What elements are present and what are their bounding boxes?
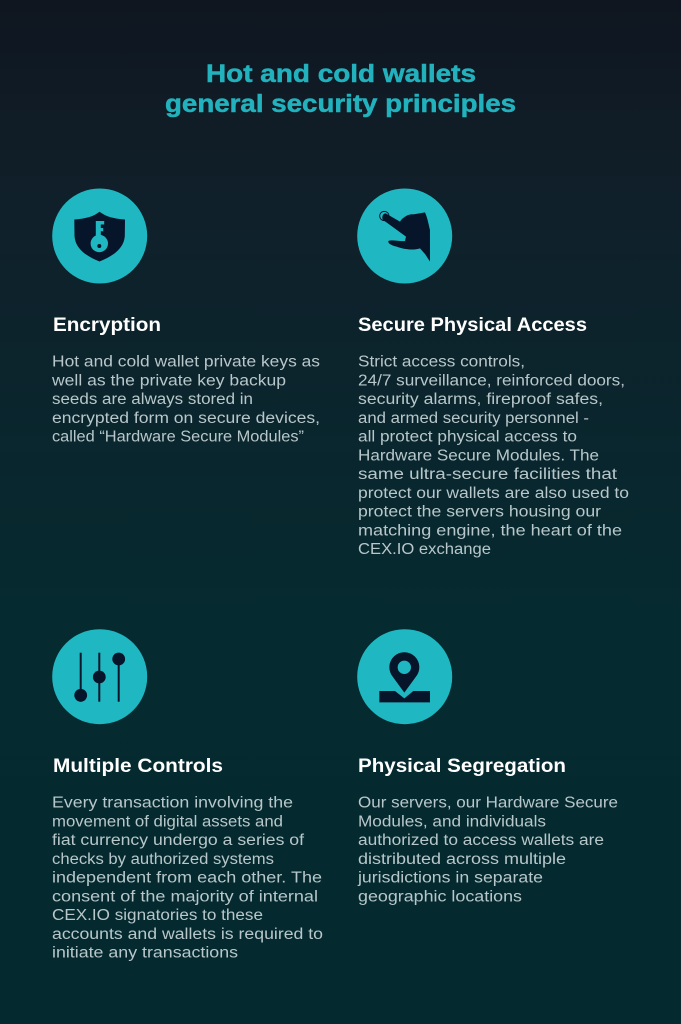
body text: protect our wallets are also used to	[358, 485, 629, 502]
body text: distributed across multiple	[358, 851, 566, 868]
body text: movement of digital assets and	[52, 813, 283, 830]
body text: independent from each other. The	[52, 870, 322, 886]
body text: geographic locations	[358, 888, 522, 905]
body text: encrypted form on secure devices,	[52, 410, 320, 427]
body text: 24/7 surveillance, reinforced doors,	[358, 372, 625, 390]
body text: well as the private key backup	[51, 372, 286, 390]
body text: accounts and wallets is required to	[52, 926, 323, 943]
body text: initiate any transactions	[52, 944, 238, 962]
body text: Strict access controls,	[358, 354, 525, 371]
body text: Every transaction involving the	[52, 794, 293, 812]
body text	[358, 354, 629, 558]
body text	[52, 794, 323, 962]
body text	[357, 794, 618, 905]
title: general security principles	[165, 90, 516, 118]
body text: called “Hardware Secure Modules”	[52, 429, 304, 446]
icon: sliders	[52, 629, 147, 724]
body text: CEX.IO exchange	[358, 541, 491, 558]
icon: map pin	[357, 629, 452, 724]
body text: Hot and cold wallet private keys as	[52, 354, 320, 371]
body text: security alarms, fireproof safes,	[358, 391, 603, 408]
panel: encryption	[51, 188, 320, 446]
title	[165, 60, 516, 118]
panel: multiple controls	[52, 629, 323, 962]
body text: same ultra-secure facilities that	[358, 466, 618, 483]
heading: Secure Physical Access	[358, 315, 587, 336]
title: Hot and cold wallets	[206, 60, 476, 88]
icon: shield with key	[52, 188, 147, 284]
body text: CEX.IO signatories to these	[52, 907, 263, 924]
body text: protect the servers housing our	[358, 504, 601, 521]
panel: secure physical access	[357, 188, 629, 558]
body text: seeds are always stored in	[52, 391, 253, 408]
body text: matching engine, the heart of the	[358, 522, 622, 540]
body text: Hardware Secure Modules. The	[358, 448, 599, 464]
body text: checks by authorized systems	[52, 851, 274, 868]
body text: Our servers, our Hardware Secure	[358, 794, 618, 812]
heading: Encryption	[53, 315, 161, 336]
icon: hand pressing button	[357, 188, 452, 284]
body text: authorized to access wallets are	[358, 832, 604, 849]
body text: and armed security personnel -	[358, 410, 589, 427]
body text: Modules, and individuals	[358, 813, 546, 830]
body text	[51, 354, 320, 446]
heading: Multiple Controls	[53, 756, 223, 777]
heading: Physical Segregation	[358, 756, 566, 777]
panel: physical segregation	[357, 629, 618, 905]
body text: all protect physical access to	[358, 429, 577, 446]
body text: fiat currency undergo a series of	[52, 832, 305, 849]
body text: jurisdictions in separate	[357, 870, 543, 886]
body text: consent of the majority of internal	[52, 888, 318, 905]
